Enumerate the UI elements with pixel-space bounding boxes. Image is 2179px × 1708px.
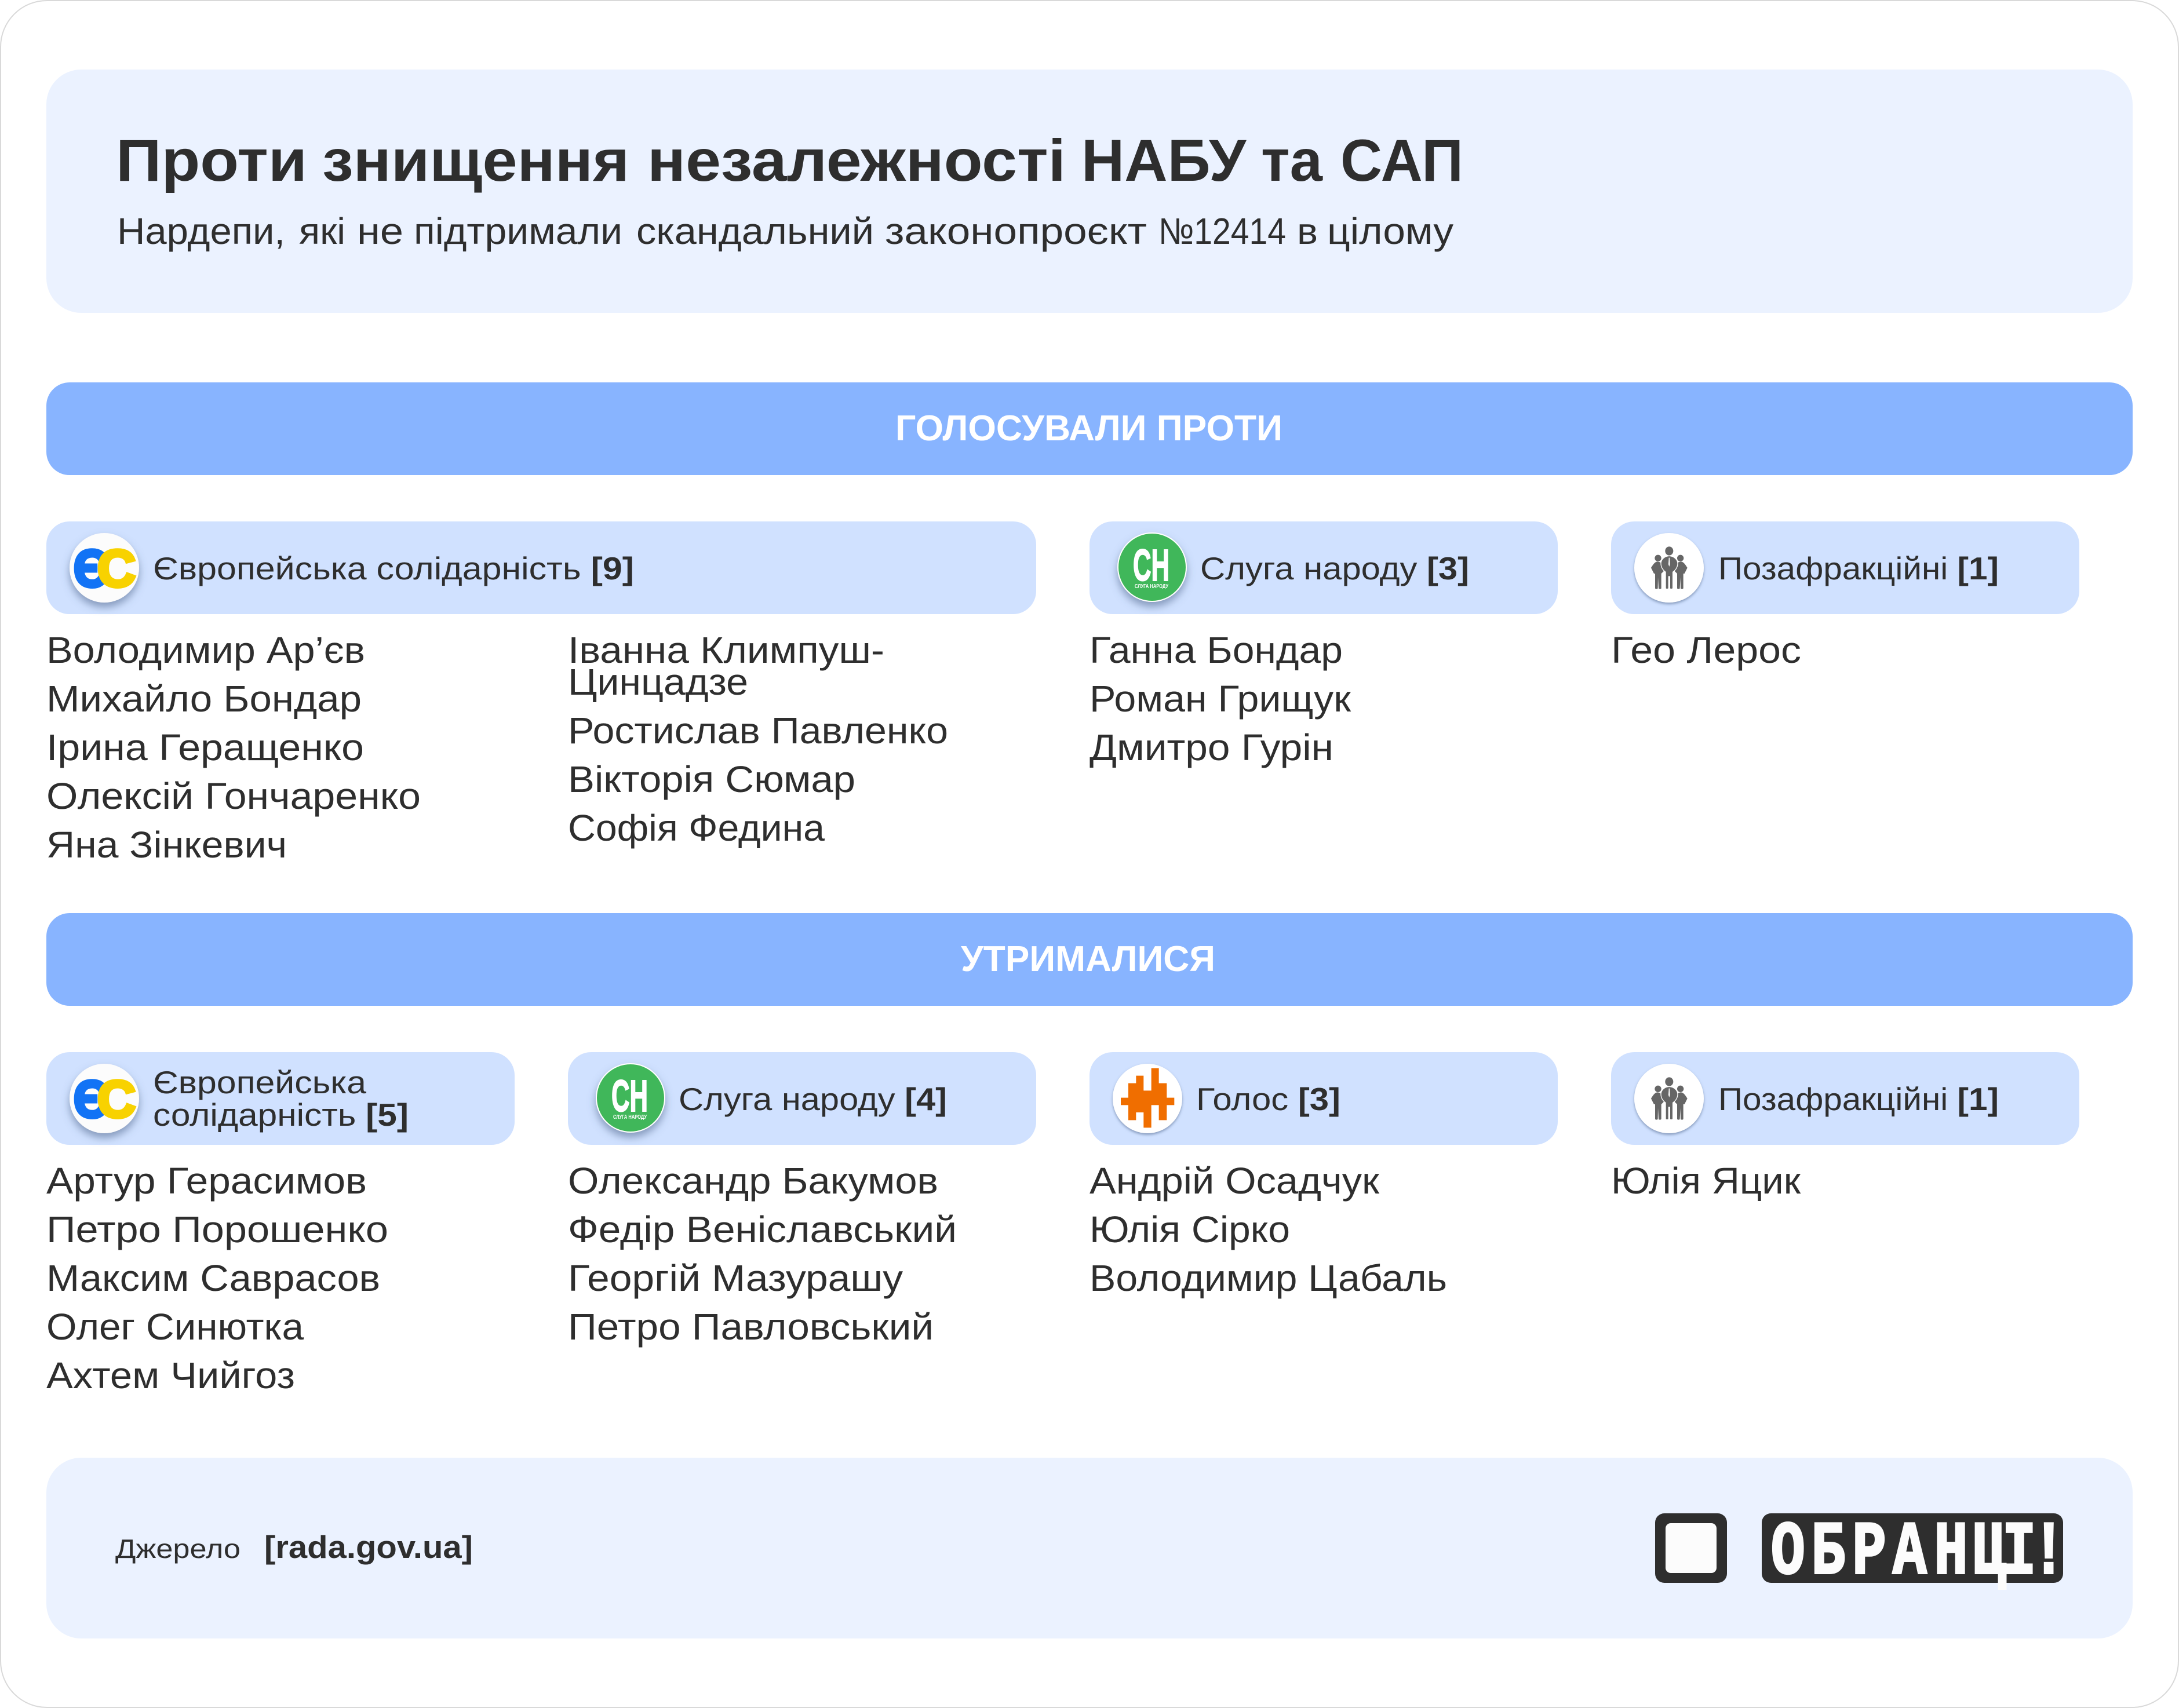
names: Артур Герасимов [46,1160,367,1202]
icon: Servant of the People logo: СН [611,1071,648,1121]
name: Гео Лерос [1611,629,1801,671]
icon: European Solidarity logo: Є [74,540,108,598]
subtitle: підтримали [414,210,622,252]
names column 1: Михайло Бондар [46,678,362,720]
title: незалежності [647,127,1066,194]
section bar: abstained [46,913,2133,1006]
party pill [46,1052,515,1145]
section bar: abstained: УТРИМАЛИСЯ [961,939,1215,979]
title [116,127,1463,194]
panel: against, non-affiliated [1611,521,2079,671]
icon: European Solidarity logo: С [97,1071,136,1129]
party pill [568,1052,1036,1145]
names column 1 [46,629,421,866]
names: Володимир Цабаль [1090,1257,1447,1299]
names: Андрій Осадчук [1090,1160,1380,1202]
names: Олег Синютка [46,1306,304,1348]
name: Юлія Яцик [1611,1160,1801,1202]
names column 2: Вікторія Сюмар [568,758,855,800]
icon: Servant of the People logo: СЛУГА НАРОДУ [1135,583,1169,590]
party label: Європейська [153,1064,366,1100]
panel: against, European Solidarity [46,521,1036,866]
title: НАБУ [1081,127,1247,194]
names: Олександр Бакумов [568,1160,938,1202]
section bar: voted against: ГОЛОСУВАЛИ ПРОТИ [895,408,1282,448]
icon: European Solidarity logo [70,533,139,603]
subtitle: скандальний [636,210,874,252]
icon: Servant of the People logo [1118,533,1186,601]
party pill [1090,521,1558,614]
names: Дмитро Гурін [1090,727,1333,768]
panel: abstained, Holos [1090,1052,1558,1299]
party label: Голос [3] [1196,1081,1340,1117]
logo: wordmark: ОБРАНЦІ! [1771,1510,2066,1596]
subtitle: цілому [1327,210,1453,252]
panel: header [46,70,2133,313]
party label [153,1064,409,1133]
icon: European Solidarity logo: С [97,540,136,598]
icon: Servant of the People logo: СЛУГА НАРОДУ [613,1114,647,1121]
icon: people [1634,1064,1704,1133]
subtitle: не [357,210,403,252]
icon: Servant of the People logo [596,1064,665,1132]
icon: European Solidarity logo [70,1064,139,1133]
names column 1: Ірина Геращенко [46,727,364,768]
party pill [1611,1052,2079,1145]
title: та [1261,127,1323,194]
names column 1: Олексій Гончаренко [46,775,421,817]
names column 2 [568,629,948,849]
icon: Holos logo [1113,1064,1182,1133]
subtitle: Нардепи, [117,210,285,252]
panel: abstained, Servant of the People [568,1052,1036,1348]
names: Юлія Сірко [1090,1209,1290,1250]
panel: against, Servant of the People [1090,521,1558,768]
names: Георгій Мазурашу [568,1257,903,1299]
subtitle: законопроєкт [885,210,1147,252]
party pill [1611,521,2079,614]
names: Ахтем Чийгоз [46,1355,295,1396]
subtitle: в [1297,210,1318,252]
names column 2: Софія Федина [568,807,825,849]
names column 2: Іванна Климпуш- [568,629,884,671]
panel: abstained, non-affiliated [1611,1052,2079,1202]
names [1090,629,1351,768]
names: Роман Грищук [1090,678,1351,720]
subtitle [117,210,1453,252]
names [1090,1160,1447,1299]
party label: солідарність [5] [153,1097,409,1133]
logo: square mark [1655,1513,1727,1583]
names [46,1160,388,1396]
party pill [46,521,1036,614]
names: Петро Павловський [568,1306,934,1348]
title: знищення [322,127,629,194]
title: САП [1340,127,1463,194]
section bar: voted against [46,382,2133,475]
panel: abstained, European Solidarity [46,1052,515,1396]
names column 2: Ростислав Павленко [568,710,948,751]
names: Федір Веніславський [568,1209,957,1250]
panel: footer [46,1458,2133,1638]
party label: Слуга народу [3] [1200,550,1469,586]
names column 2: Цинцадзе [568,661,748,703]
names column 1: Яна Зінкевич [46,824,287,866]
names: Петро Порошенко [46,1209,388,1250]
subtitle: які [299,210,345,252]
names [568,1160,957,1348]
names: Максим Саврасов [46,1257,380,1299]
icon: Servant of the People logo: СН [1133,541,1169,590]
party label: Слуга народу [4] [679,1081,947,1117]
party label: Європейська солідарність [9] [153,550,634,586]
party label: Позафракційні [1] [1718,550,1999,586]
names: Ганна Бондар [1090,629,1343,671]
icon: people [1634,533,1704,603]
source link: [rada.gov.ua] [264,1529,473,1565]
source label: Джерело [115,1534,241,1564]
names column 1: Володимир Ар’єв [46,629,365,671]
icon: European Solidarity logo: Є [74,1071,108,1129]
title: Проти [116,127,307,194]
subtitle: №12414 [1158,210,1286,252]
party pill [1090,1052,1558,1145]
party label: Позафракційні [1] [1718,1081,1999,1117]
